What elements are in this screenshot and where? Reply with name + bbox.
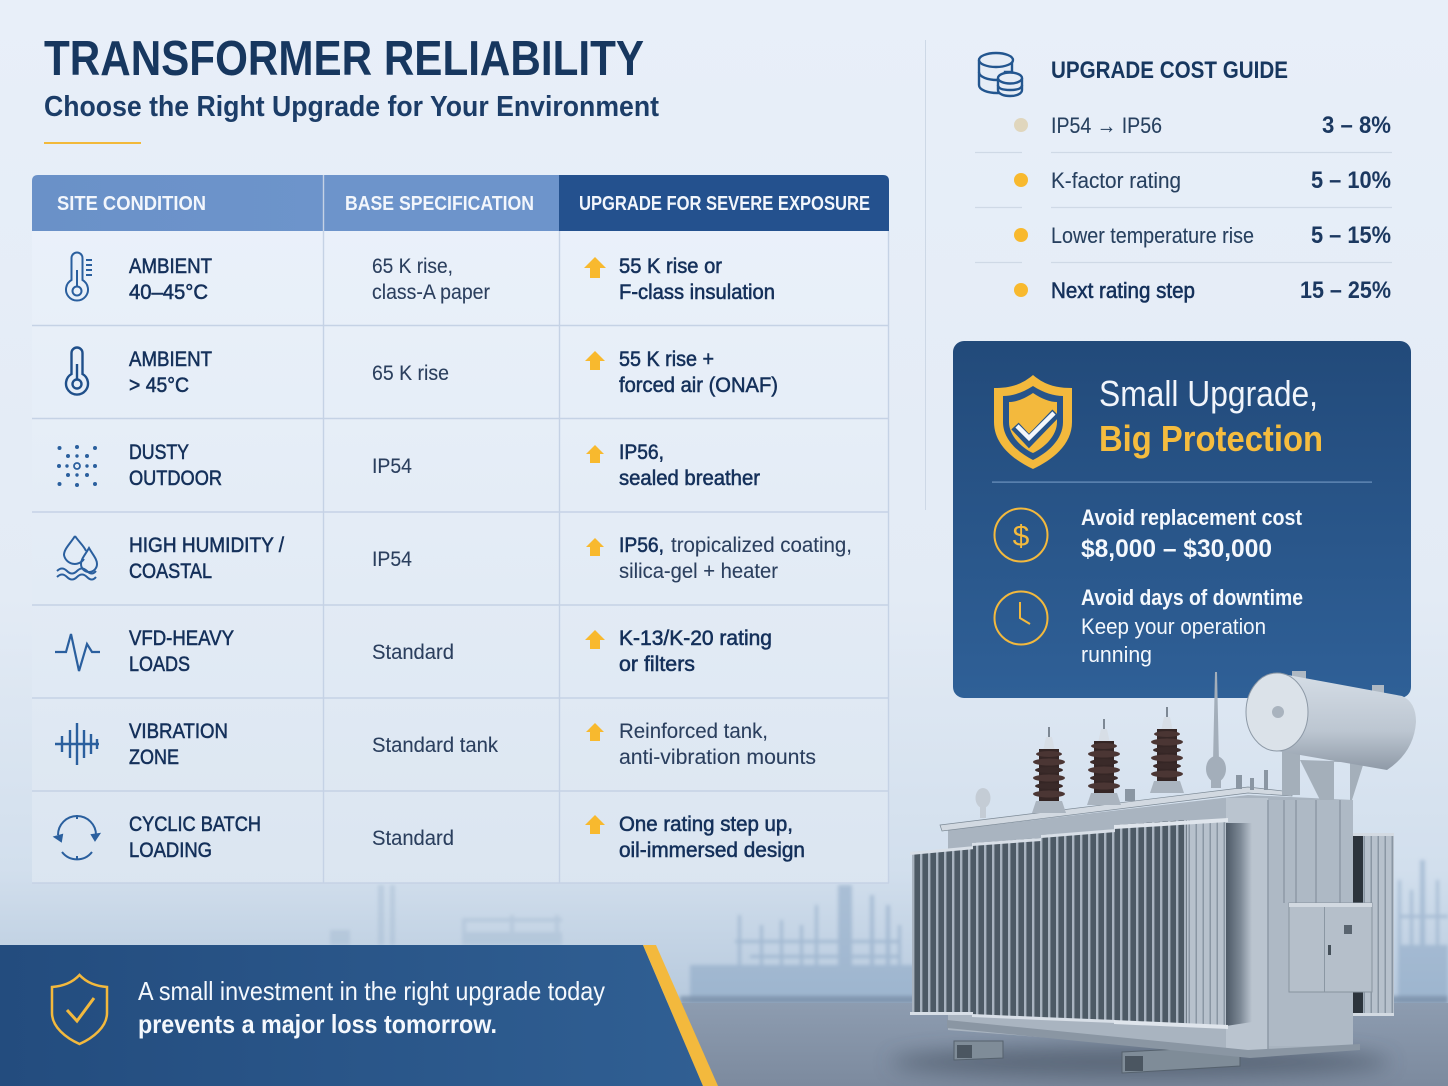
panel: upgrade cost guide <box>975 53 1392 304</box>
radiator bank 4 <box>1114 818 1228 1029</box>
header labels: SITE CONDITION <box>57 193 206 215</box>
cost row: next rating: Next rating step <box>1051 278 1195 303</box>
bushing 1 <box>1032 727 1066 813</box>
row: vibration: Standard tank <box>372 734 498 757</box>
icon: upgrade arrow <box>585 630 605 649</box>
tank right face <box>1226 798 1353 1053</box>
row: humidity: tropicalized coating, <box>671 534 852 557</box>
icon: dust particles <box>57 445 97 487</box>
ground <box>640 1003 1448 1086</box>
cost row: k-factor: 5 – 10% <box>1311 167 1391 194</box>
subtitle: Choose the Right Upgrade for Your Environment <box>44 91 659 123</box>
icon: coin stacks <box>979 53 1022 96</box>
row: ambient 40-45: 65 K rise, <box>372 255 453 278</box>
header: upgrade <box>559 175 889 231</box>
row: humidity: IP54 <box>372 548 412 571</box>
cost row: IP54 to IP56: IP54 → IP56 <box>1051 113 1162 138</box>
icon: drops and waves <box>57 536 97 580</box>
cost row: temperature rise: 5 – 15% <box>1311 222 1391 249</box>
lightning arrester <box>1206 672 1226 788</box>
table body <box>32 231 889 883</box>
row: dusty outdoor: DUSTY <box>129 441 189 464</box>
row: dusty outdoor: IP54 <box>372 455 412 478</box>
row: VFD loads: Standard <box>372 641 454 664</box>
row: ambient 40-45 <box>66 253 775 304</box>
row: ambient 40-45: 40–45°C <box>129 281 208 304</box>
header labels: BASE SPECIFICATION <box>345 193 534 215</box>
banner message <box>138 976 605 1039</box>
row: ambient over 45: forced air (ONAF) <box>619 374 778 397</box>
transformer illustration <box>890 671 1416 1078</box>
cost row: k-factor <box>1014 167 1391 194</box>
cost row: temperature rise: Lower temperature rise <box>1051 223 1254 248</box>
row: dusty outdoor: sealed breather <box>619 467 760 490</box>
benefit: downtime: Avoid days of downtime <box>1081 585 1303 610</box>
row: vibration: anti-vibration mounts <box>619 746 816 769</box>
bottom banner <box>0 945 718 1086</box>
row: vibration: VIBRATION <box>129 720 228 743</box>
row: ambient over 45 <box>66 348 778 397</box>
row: vibration: Reinforced tank, <box>619 720 768 743</box>
icon: upgrade arrow <box>584 257 606 278</box>
base rail <box>947 1020 1360 1058</box>
row: ambient over 45: > 45°C <box>129 374 189 397</box>
skids <box>954 1041 1240 1073</box>
row: ambient over 45: 55 K rise + <box>619 348 714 371</box>
icon: dollar circle: $ <box>1013 520 1030 553</box>
header labels: UPGRADE FOR SEVERE EXPOSURE <box>579 193 870 215</box>
benefit: replacement cost <box>1081 505 1303 563</box>
icon: upgrade arrow <box>585 815 605 834</box>
tank body <box>948 795 1353 1053</box>
callout highlight: Big Protection <box>1099 418 1323 459</box>
tank lid <box>940 787 1292 831</box>
row: ambient over 45: AMBIENT <box>129 348 212 371</box>
row: dusty outdoor: OUTDOOR <box>129 467 222 490</box>
icon: upgrade arrow <box>586 445 604 463</box>
row: cyclic loading: One rating step up, <box>619 813 793 836</box>
cost row: k-factor: K-factor rating <box>1051 168 1181 193</box>
title block <box>44 32 659 144</box>
row: VFD loads: or filters <box>619 653 695 676</box>
icon: upgrade arrow <box>586 538 604 556</box>
icon: thermometer with scale <box>66 253 92 301</box>
row: vibration <box>55 720 816 769</box>
accent rule <box>44 142 141 144</box>
icon: dollar circle <box>994 508 1048 562</box>
row: humidity: IP56, <box>619 534 664 557</box>
row: VFD loads: VFD-HEAVY <box>129 627 234 650</box>
heading: UPGRADE COST GUIDE <box>1051 57 1288 84</box>
icon: upgrade arrow <box>585 351 605 370</box>
row: ambient 40-45: 55 K rise or <box>619 255 722 278</box>
row: VFD loads: LOADS <box>129 653 190 676</box>
icon: thermometer <box>66 348 88 395</box>
header: base specification <box>323 175 559 231</box>
row: ambient 40-45: F-class insulation <box>619 281 775 304</box>
cost row: IP54 to IP56 <box>1014 112 1391 139</box>
banner message: A small investment in the right upgrade today <box>138 976 605 1006</box>
callout heading: Small Upgrade, <box>1099 373 1318 414</box>
row: VFD loads: K-13/K-20 rating <box>619 627 772 650</box>
icon: vibration bars <box>55 723 99 765</box>
banner background <box>0 945 703 1086</box>
cost row: next rating <box>1014 277 1391 304</box>
row: vibration: ZONE <box>129 746 179 769</box>
row: cyclic loading: LOADING <box>129 839 212 862</box>
hazy refinery skyline <box>330 860 1448 1004</box>
icon: yellow shield <box>994 375 1072 469</box>
row: ambient over 45: 65 K rise <box>372 362 449 385</box>
banner message: prevents a major loss tomorrow. <box>138 1009 497 1039</box>
row: humidity: COASTAL <box>129 560 212 583</box>
benefit: downtime: running <box>1081 642 1152 667</box>
cost row: temperature rise <box>1014 222 1391 249</box>
row: cyclic loading: oil-immersed design <box>619 839 805 862</box>
vertical panel divider <box>925 40 926 510</box>
row: ambient 40-45: AMBIENT <box>129 255 212 278</box>
lid fittings <box>1092 770 1268 805</box>
yellow edge <box>643 945 718 1086</box>
row: cyclic loading: Standard <box>372 827 454 850</box>
row: dusty outdoor: IP56, <box>619 441 664 464</box>
title: TRANSFORMER RELIABILITY <box>44 32 644 86</box>
row: humidity: HIGH HUMIDITY / <box>129 534 284 557</box>
header: site condition <box>32 175 323 231</box>
icon: clock <box>994 592 1048 644</box>
benefit: downtime: Keep your operation <box>1081 614 1266 639</box>
control box <box>1289 903 1372 992</box>
icon: waveform <box>55 634 100 671</box>
cost row: next rating: 15 – 25% <box>1300 277 1391 304</box>
rear radiator <box>1353 833 1394 1016</box>
card background <box>953 341 1411 698</box>
conservator supports <box>1282 750 1364 800</box>
row: ambient 40-45: class-A paper <box>372 281 490 304</box>
row: humidity <box>57 534 852 583</box>
row: dusty outdoor <box>57 441 760 490</box>
benefit: downtime <box>1081 585 1303 667</box>
ground shadow <box>890 1046 1390 1078</box>
row: humidity: silica-gel + heater <box>619 560 778 583</box>
radiator bank 2 <box>972 838 1041 1020</box>
cost row: IP54 to IP56: 3 – 8% <box>1322 112 1391 139</box>
row: cyclic loading: CYCLIC BATCH <box>129 813 261 836</box>
bushing 3 <box>1150 707 1184 793</box>
radiator bank 3 <box>1041 829 1116 1023</box>
icon: upgrade arrow <box>586 723 604 741</box>
radiator bank 1 <box>910 846 975 1015</box>
gas relay <box>976 788 990 818</box>
header labels <box>57 193 870 215</box>
row: VFD loads <box>55 627 772 676</box>
benefit: replacement cost: Avoid replacement cost <box>1081 505 1303 530</box>
row: cyclic loading <box>55 813 805 862</box>
icon: cycle arrows <box>55 815 99 860</box>
conservator tank <box>1246 671 1416 770</box>
panel: small upgrade callout <box>953 341 1411 698</box>
bushing 2 <box>1087 719 1121 805</box>
benefit: replacement cost: $8,000 – $30,000 <box>1081 535 1272 563</box>
panel: upgrade table <box>32 175 889 883</box>
icon: shield <box>52 975 107 1044</box>
